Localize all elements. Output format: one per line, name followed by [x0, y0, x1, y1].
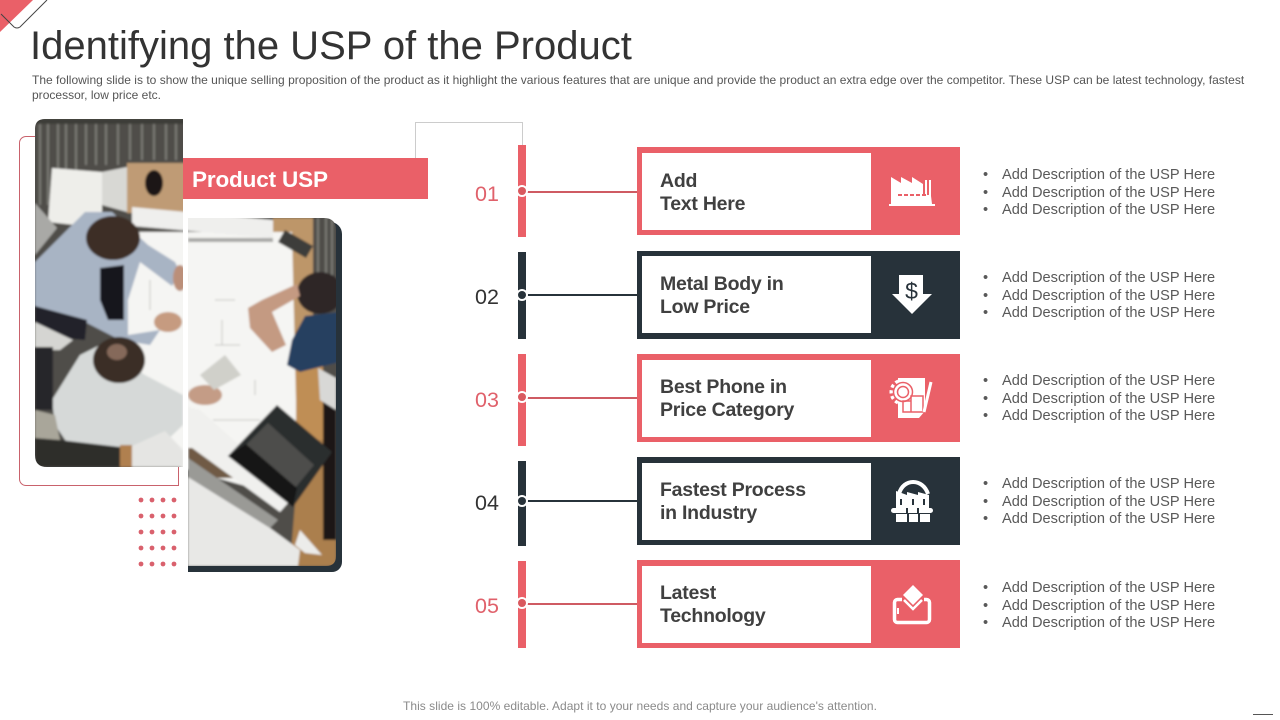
- number 02: 02: [475, 285, 499, 309]
- calculator: [200, 355, 241, 390]
- card 04: in Industry: [660, 502, 757, 524]
- description list 05: Add Description of the USP Here: [1002, 615, 1215, 631]
- description list 02: Add Description of the USP Here: [1002, 288, 1215, 304]
- crumpled paper: [295, 530, 322, 555]
- description list 04: Add Description of the USP Here: [1002, 476, 1215, 492]
- description list 04: Add Description of the USP Here: [1002, 511, 1215, 527]
- man 2: [52, 345, 183, 447]
- row 01: [475, 145, 960, 237]
- marker 03: [518, 393, 526, 401]
- connector 05: [527, 603, 637, 605]
- description list 03: Add Description of the USP Here: [1002, 390, 1215, 406]
- marker 02: [518, 291, 526, 299]
- description list 01: [984, 167, 1215, 218]
- marker 04: [518, 497, 526, 505]
- icon: gear and notebook: [890, 378, 932, 418]
- description list 05: Add Description of the USP Here: [1002, 580, 1215, 596]
- drawing marks: [150, 280, 260, 420]
- number 05: 05: [475, 594, 499, 618]
- description list 01: Add Description of the USP Here: [1002, 167, 1215, 183]
- description list 04: Add Description of the USP Here: [1002, 494, 1215, 510]
- card 01: Add: [660, 170, 697, 192]
- card 03: Price Category: [660, 399, 794, 421]
- timeline bar 04: [518, 461, 526, 546]
- description list 03: Add Description of the USP Here: [1002, 373, 1215, 389]
- description list 01: Add Description of the USP Here: [1002, 202, 1215, 218]
- rolls: [192, 447, 290, 514]
- connector 02: [527, 294, 637, 296]
- description list 02: Add Description of the USP Here: [1002, 270, 1215, 286]
- description list 03: [984, 373, 1215, 424]
- number 04: 04: [475, 491, 499, 515]
- photo: team around a desk: [35, 119, 336, 566]
- number 01: 01: [475, 182, 499, 206]
- woman: [296, 271, 336, 315]
- papers: [48, 168, 102, 228]
- heading banner: Product USP: Product USP: [192, 167, 328, 192]
- page marker: [1253, 714, 1273, 715]
- timeline bar 01: [518, 145, 526, 237]
- laptop: [228, 405, 332, 507]
- row 02: [475, 251, 960, 339]
- connector 04: [527, 500, 637, 502]
- icon: dollar down arrow: $: [905, 278, 918, 304]
- description list 05: [984, 580, 1215, 631]
- table top: [127, 163, 187, 213]
- title: Identifying the USP of the Product: [30, 24, 632, 68]
- number 03: 03: [475, 388, 499, 412]
- icon: dollar down arrow: [892, 275, 932, 314]
- description list 05: Add Description of the USP Here: [1002, 598, 1215, 614]
- row 03: [475, 354, 960, 446]
- man 1: [35, 203, 57, 255]
- card 04: [637, 457, 960, 545]
- footer note: This slide is 100% editable. Adapt it to your needs and capture your audience's attention.: [403, 699, 877, 713]
- marker 05: [518, 599, 526, 607]
- dot grid: [138, 498, 176, 566]
- icon: warehouse line: [891, 480, 933, 522]
- heading banner: Product USP: [183, 158, 428, 199]
- icon: phone with layers: [892, 585, 932, 624]
- card 02: Low Price: [660, 296, 750, 318]
- corner decoration: [0, 0, 48, 32]
- row 04: [475, 457, 960, 546]
- card 03: [637, 354, 960, 442]
- icon: factory: [889, 177, 935, 206]
- card 02: [637, 251, 960, 339]
- dark floor at right: [323, 395, 336, 540]
- connector bracket: [415, 122, 523, 158]
- description list 01: Add Description of the USP Here: [1002, 184, 1215, 200]
- card 04: Fastest Process: [660, 479, 806, 501]
- card 05: Latest: [660, 582, 716, 604]
- card 02: Metal Body in: [660, 273, 784, 295]
- brown table wedge: [188, 446, 234, 480]
- timeline bar 02: [518, 252, 526, 339]
- card 05: [637, 560, 960, 648]
- phone: [278, 230, 313, 258]
- timeline bar 05: [518, 561, 526, 648]
- mug: [145, 170, 163, 196]
- card 05: Technology: [660, 605, 765, 627]
- intro text: The following slide is to show the unique selling proposition of the product as it highlight the various features that are unique and provide the product an extra edge over the competitor. These USP can be latest technology, fastest processor, low price etc.: [32, 73, 1244, 102]
- outline frame behind photo: [19, 136, 179, 486]
- description list 02: [984, 270, 1215, 321]
- description list 02: Add Description of the USP Here: [1002, 305, 1215, 321]
- white gap strip between photos: [183, 119, 188, 579]
- connector 01: [527, 191, 637, 193]
- blueprint: [125, 232, 296, 500]
- marker 01: [518, 187, 526, 195]
- description list 04: [984, 476, 1215, 527]
- card 01: Text Here: [660, 193, 745, 215]
- timeline bar 03: [518, 354, 526, 446]
- card 01: [637, 147, 960, 235]
- card 03: Best Phone in: [660, 376, 787, 398]
- dark backing of right photo: [188, 222, 342, 572]
- connector 03: [527, 397, 637, 399]
- carpet stripes: [40, 124, 332, 275]
- description list 03: Add Description of the USP Here: [1002, 408, 1215, 424]
